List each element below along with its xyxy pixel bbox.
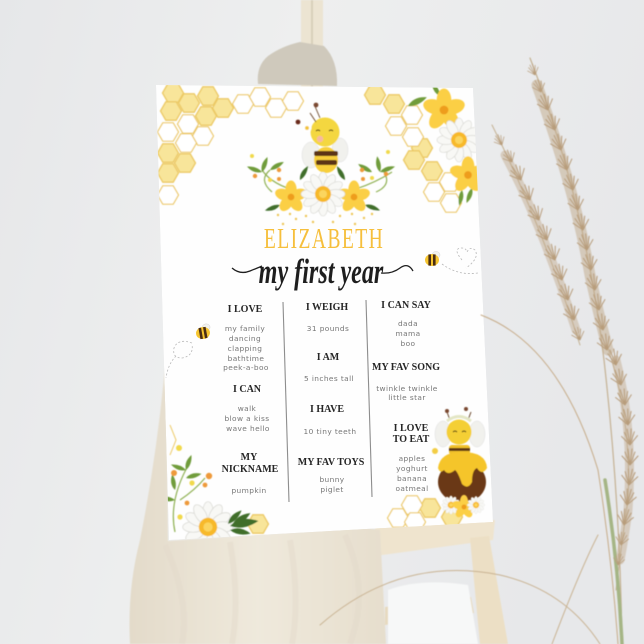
column 1: blow a kiss (225, 414, 269, 423)
column 1: peek-a-boo (223, 363, 269, 372)
column 3: oatmeal (395, 484, 429, 493)
column 2: piglet (320, 485, 344, 494)
small bee with dashed heart trail: right (425, 248, 478, 274)
column 1: bathtime (228, 354, 264, 363)
column 2: bunny (319, 475, 345, 484)
column 1: NICKNAME (222, 464, 279, 475)
column 2: 5 inches tall (304, 374, 354, 383)
honeycomb and flowers: bottom right (388, 495, 485, 531)
column 2: 10 tiny teeth (304, 427, 356, 436)
column 1 (222, 304, 279, 495)
column 2: I WEIGH (306, 302, 348, 313)
column 1: pumpkin (231, 486, 267, 495)
title: my first year (232, 258, 414, 290)
column 3: mama (395, 329, 421, 338)
floral wreath (246, 150, 396, 224)
column 1: walk (238, 404, 257, 413)
column 2: I HAVE (310, 404, 344, 415)
column 2: I AM (317, 352, 340, 363)
column 1: I LOVE (228, 304, 263, 315)
poster (156, 81, 493, 552)
column 3: I CAN SAY (381, 300, 432, 311)
bee on honey pot (432, 407, 487, 503)
column 3: apples (399, 454, 425, 463)
column 1: MY (241, 452, 258, 463)
easel and cloth (129, 0, 508, 644)
column 3: boo (401, 339, 416, 348)
column 2: MY FAV TOYS (298, 457, 365, 468)
flowers and honeycomb: bottom left (168, 424, 270, 539)
honeycomb and flowers: top right (364, 81, 488, 212)
column 1: I CAN (233, 384, 262, 395)
column dividers (283, 300, 372, 502)
title: my first year: my first year (259, 252, 384, 291)
top bee illustration (296, 103, 348, 173)
column 1: my family (225, 324, 265, 333)
column 3: I LOVE (394, 423, 429, 434)
column 3: twinkle twinkle (376, 384, 438, 393)
pampas grass (320, 58, 638, 644)
column 1: clapping (228, 344, 262, 353)
small bee with dashed trail: left (166, 323, 212, 378)
column 2 (298, 302, 365, 494)
column 2: 31 pounds (307, 324, 349, 333)
column 3: little star (388, 393, 426, 402)
column 3: banana (397, 474, 427, 483)
name: Elizabeth: ELIZABETH (264, 224, 384, 255)
column 3: yoghurt (396, 464, 428, 473)
column 3: TO EAT (393, 434, 430, 445)
column 1: wave hello (226, 424, 270, 433)
column 3: dada (398, 319, 418, 328)
column 3 (372, 300, 440, 493)
column 3: MY FAV SONG (372, 362, 440, 373)
column 1: dancing (229, 334, 261, 343)
honeycomb: top left (158, 84, 304, 204)
